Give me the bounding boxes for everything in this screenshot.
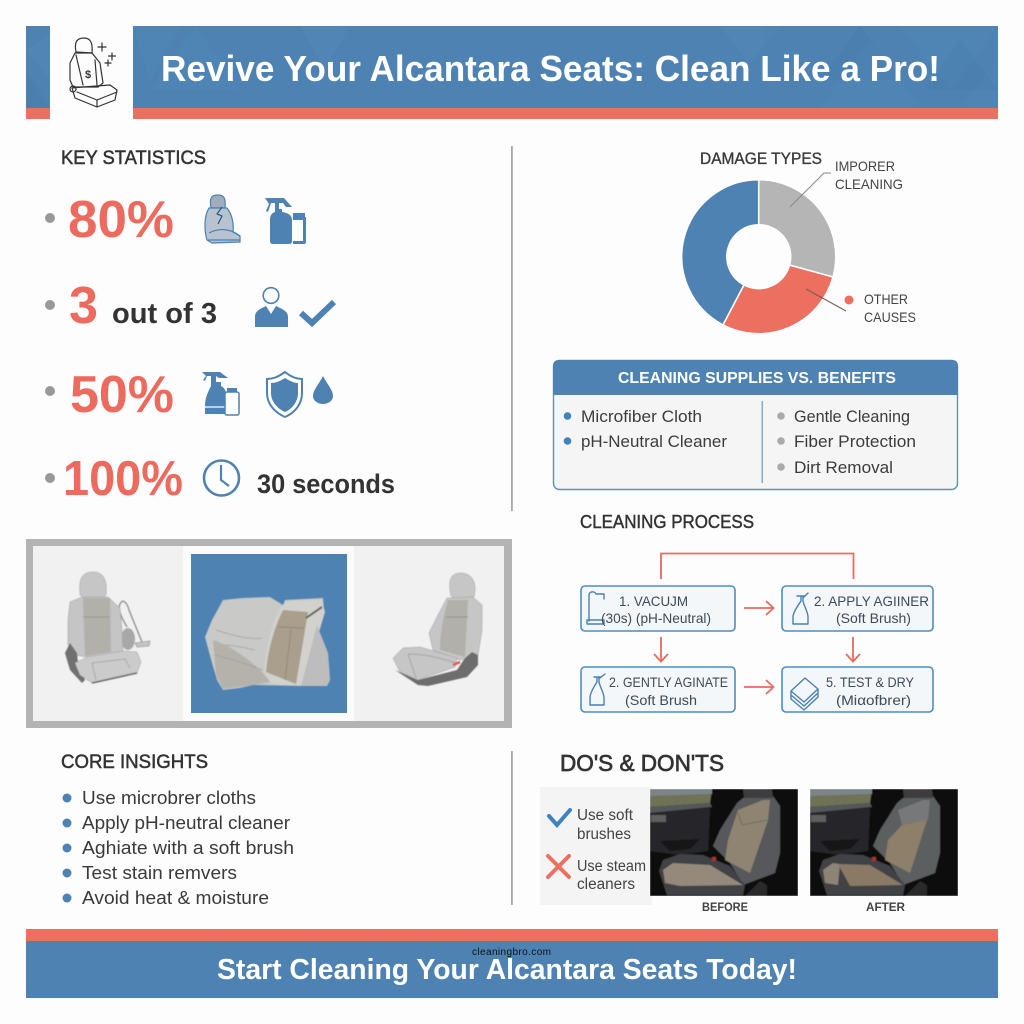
list: core insights: Apply pH-neutral cleaner bbox=[82, 812, 290, 833]
benefits list: Gentle Cleaning bbox=[794, 407, 910, 426]
list: core insights bbox=[62, 787, 294, 908]
step 4 test and dry: 5. TEST & DRY bbox=[826, 674, 915, 690]
label: after: AFTER bbox=[866, 902, 906, 914]
step 4 test and dry: (Miαofbrer) bbox=[836, 692, 911, 708]
step 3 agitate bbox=[581, 667, 735, 712]
callout: other causes bbox=[806, 289, 916, 325]
panel: do's and don'ts list: brushes bbox=[577, 826, 631, 843]
stat: 50%: 50% bbox=[70, 366, 174, 424]
supplies list: Microfiber Cloth bbox=[581, 407, 702, 426]
icon: blue check bbox=[549, 810, 570, 825]
arrow bbox=[744, 601, 774, 615]
label: before: BEFORE bbox=[702, 902, 748, 914]
footer call to action: Start Cleaning Your Alcantara Seats Today! bbox=[217, 954, 797, 986]
icon: damaged seat bbox=[205, 195, 240, 243]
step 1 vacuum: (30s) (pH-Neutral) bbox=[601, 610, 711, 626]
heading: do's and don'ts: DO'S & DON'TS bbox=[560, 750, 724, 776]
stat: 80% bbox=[45, 191, 306, 249]
stat: 100% bbox=[45, 452, 395, 506]
arrow bbox=[744, 680, 774, 694]
footer url: cleaningbro.com bbox=[472, 947, 551, 958]
donut chart: damage types bbox=[682, 180, 836, 334]
title: Revive Your Alcantara Seats: Clean Like a Pro! bbox=[161, 48, 940, 89]
callout: improper cleaning: CLEANING bbox=[835, 176, 903, 192]
arrow bbox=[846, 637, 860, 662]
step 1 vacuum bbox=[581, 586, 735, 631]
stat: 3 out of 3: 3 bbox=[69, 277, 98, 335]
step 1 vacuum: 1. VACUJM bbox=[619, 593, 688, 609]
step 3 agitate: (Soft Brush bbox=[625, 692, 697, 708]
icon: seat with sparkles bbox=[70, 38, 117, 107]
icon: seat with sparkles: $ bbox=[85, 69, 91, 81]
benefits list: Dirt Removal bbox=[794, 458, 893, 477]
heading: core insights: CORE INSIGHTS bbox=[61, 752, 208, 773]
arrow bbox=[654, 637, 668, 662]
image: seat side view bbox=[393, 573, 482, 686]
panel: do's and don'ts list: Use steam bbox=[577, 858, 646, 875]
stat: 50% bbox=[45, 366, 333, 424]
panel: do's and don'ts list: Use soft bbox=[577, 807, 634, 824]
callout: improper cleaning: IMPORER bbox=[835, 158, 895, 174]
image: dirty seat on blue bbox=[191, 554, 347, 713]
list: core insights: Test stain remvers bbox=[82, 862, 237, 883]
icon: water drop bbox=[313, 376, 333, 404]
step 2 apply: 2. APPLY AGIINER bbox=[814, 593, 929, 609]
footer banner bbox=[26, 929, 998, 998]
table heading: CLEANING SUPPLIES VS. BENEFITS bbox=[618, 370, 896, 387]
callout: improper cleaning bbox=[790, 158, 903, 207]
benefits list: Fiber Protection bbox=[794, 432, 916, 451]
icon: clock bbox=[204, 460, 239, 496]
photo: before bbox=[650, 789, 798, 896]
stat: 100%: 30 seconds bbox=[257, 469, 395, 499]
icon: person bbox=[255, 288, 288, 327]
panel: do's and don'ts list bbox=[540, 787, 652, 905]
panel: do's and don'ts list: cleaners bbox=[577, 876, 635, 893]
photo: after bbox=[810, 789, 958, 896]
step 4 test and dry bbox=[782, 667, 933, 712]
panel: seat image strip bbox=[26, 539, 512, 728]
callout: other causes: CAUSES bbox=[864, 309, 916, 325]
stat: 100%: 100% bbox=[63, 452, 183, 506]
icon: spray and bottle bbox=[265, 198, 306, 244]
icon: cleaning supplies bbox=[202, 372, 239, 415]
list: core insights: Use microbrer cloths bbox=[82, 787, 256, 808]
icon: red cross bbox=[548, 856, 569, 877]
arrow: top connector bbox=[661, 554, 854, 579]
heading: damage types: DAMAGE TYPES bbox=[700, 150, 822, 168]
icon: shield bbox=[267, 372, 302, 417]
callout: other causes: OTHER bbox=[864, 291, 908, 307]
heading: key statistics: KEY STATISTICS bbox=[61, 148, 206, 169]
list: core insights: Avoid heat & moisture bbox=[82, 887, 269, 908]
stat: 80%: 80% bbox=[68, 191, 174, 249]
image: seat with vacuum bbox=[65, 572, 150, 683]
step 3 agitate: 2. GENTLY AGINATE bbox=[609, 674, 728, 690]
list: core insights: Aghiate with a soft brush bbox=[82, 837, 294, 858]
step 2 apply: (Soft Brush) bbox=[836, 610, 911, 626]
stat: 3 out of 3 bbox=[45, 277, 334, 335]
stat: 3 out of 3: out of 3 bbox=[112, 298, 217, 330]
supplies list bbox=[564, 407, 727, 451]
flow: cleaning process bbox=[581, 554, 933, 712]
icon: check mark bbox=[301, 302, 334, 323]
benefits list bbox=[777, 407, 916, 477]
supplies list: pH-Neutral Cleaner bbox=[581, 432, 727, 451]
step 2 apply bbox=[782, 586, 933, 631]
heading: cleaning process: CLEANING PROCESS bbox=[580, 512, 754, 532]
panel: cleaning supplies vs benefits bbox=[553, 360, 958, 490]
header banner bbox=[26, 26, 998, 119]
